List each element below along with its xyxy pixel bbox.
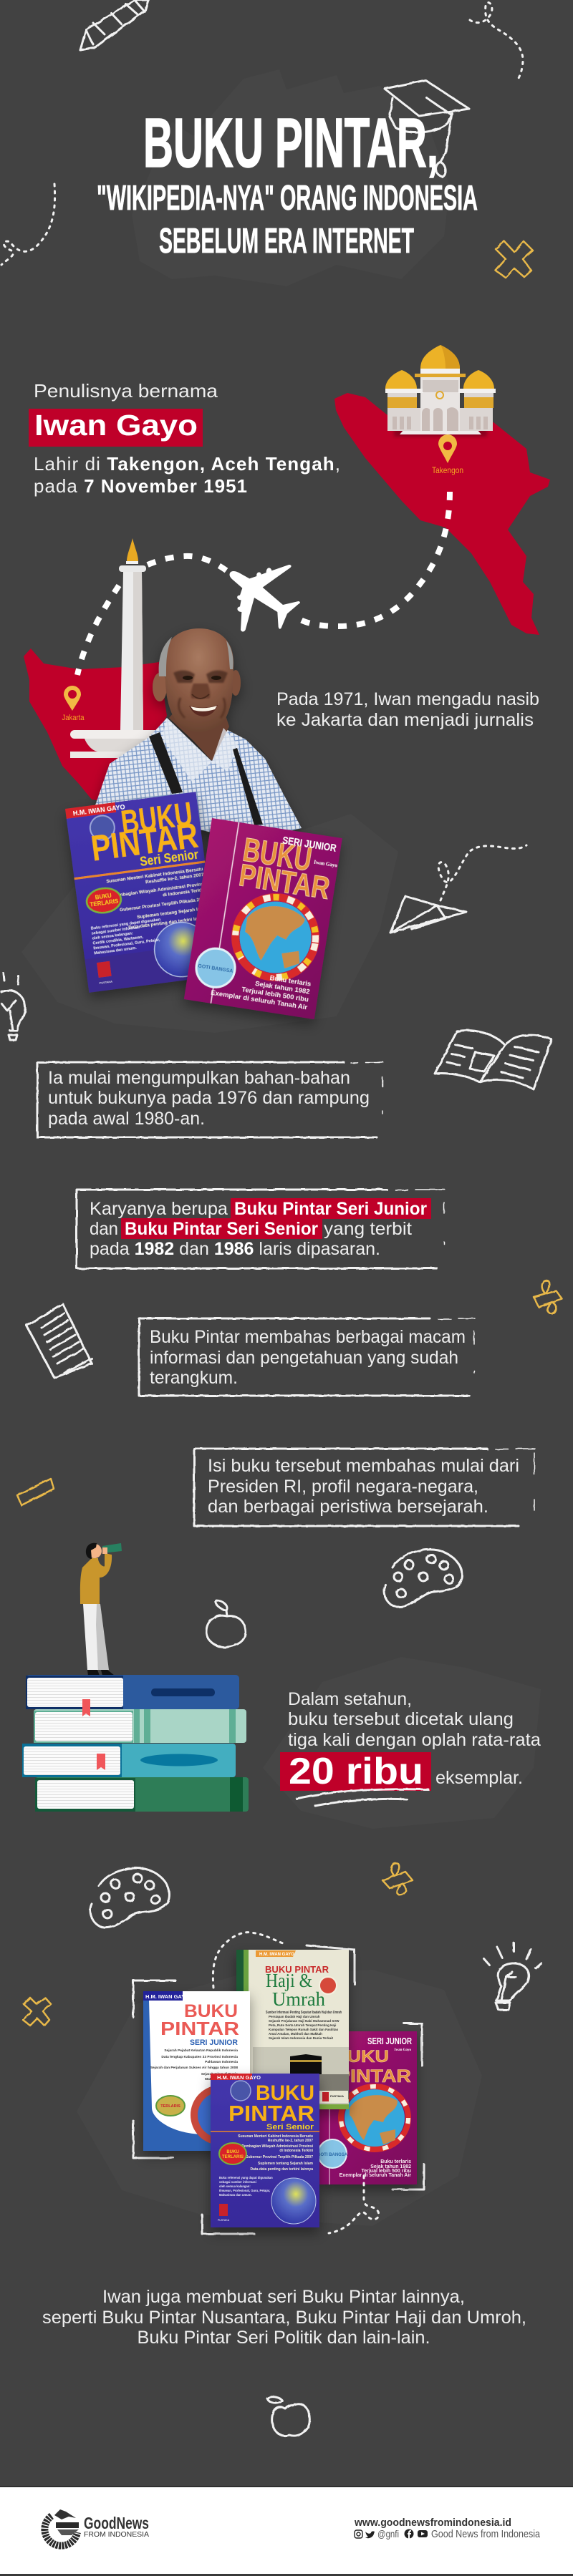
book cover: blue Seri Senior in collection: Gubernur Provinsi Terpilih Pilkada 2007 (246, 2155, 313, 2159)
book cover: blue Seri Senior in collection: BUKU (256, 2081, 314, 2105)
book: green (35, 1777, 249, 1812)
dotted trail below books (329, 2176, 379, 2233)
book cover: Haji and Umrah: PUSTAKA (330, 2094, 344, 2098)
book cover: blue Seri Senior in collection: H.M. IWAN GAYO (217, 2074, 261, 2081)
text box: collecting material (37, 1062, 383, 1137)
book cover: Seri Junior: Sejak tahun 1982 (254, 980, 310, 996)
icon: facebook (404, 2529, 414, 2539)
book cover: white Seri Junior: Sejarah Pejabat Kelautan Republik Indonesia (164, 2048, 238, 2053)
book cover: Haji and Umrah: Persiapan Ibadah Haji dan Umrah (269, 2015, 320, 2018)
book cover: Seri Senior: PUSTAKA (99, 980, 112, 985)
book cover: white Seri Junior: BUKU (184, 2001, 238, 2021)
book cover: Seri Junior: Exemplar di seluruh Tanah Air (211, 989, 308, 1011)
book cover: Seri Junior: BUKU (241, 831, 314, 878)
book cover: Haji and Umrah (236, 1950, 349, 2109)
book cover: Seri Senior: Cerdik cendikia, Wartawan, (92, 935, 144, 946)
dotted trail from paper plane (438, 845, 526, 900)
text: journalist caption (276, 689, 539, 730)
text box: contents: terangkum. (150, 1368, 238, 1388)
map: Aceh (334, 393, 550, 635)
icon: Jakarta pin: Jakarta (62, 714, 85, 722)
icon: chalk apple upper (206, 1600, 246, 1647)
icon: instagram (355, 2530, 362, 2538)
logo: GoodNews from Indonesia (44, 2509, 149, 2546)
chalk underline (297, 1789, 428, 1806)
book cover: Seri Junior: Buku terlaris (269, 974, 312, 988)
text: reprint statistic: tiga kali dengan oplah rata-rata (288, 1730, 541, 1750)
text box: topics: dan berbagai peristiwa bersejarah. (208, 1497, 488, 1517)
book cover: blue Seri Senior in collection: di Indonesia Terkini (279, 2149, 314, 2153)
book cover: magenta Seri Junior in collection: BUKU (333, 2047, 389, 2066)
book cover: blue Seri Senior in collection: Seri Senior (266, 2123, 314, 2132)
book cover: Haji and Umrah: Haji & (266, 1970, 312, 1991)
book cover: white Seri Junior: PINTAR (160, 2018, 239, 2039)
book: teal (22, 1744, 236, 1777)
book cover: Haji and Umrah: Umrah (272, 1988, 325, 2010)
dotted trail top right (470, 2, 523, 81)
highlight: Seri Senior (121, 1218, 322, 1239)
book cover: magenta Seri Junior in collection: Sejak tahun 1982 (370, 2164, 411, 2169)
book cover: Seri Senior: Data-data penting dan terkini lainnya (128, 915, 210, 930)
book: light teal (34, 1709, 246, 1743)
suspenders (149, 732, 183, 794)
book cover: Seri Senior: Gubernur Provinsi Terpilih Pilkada 2007 (120, 897, 208, 913)
text: author intro (29, 380, 340, 497)
icon: monument (70, 538, 163, 758)
book cover: Seri Junior: SERI JUNIOR (281, 835, 337, 855)
icon: chalk apple lower (267, 2397, 309, 2436)
book cover: Haji and Umrah: Peta, Rute Serta Umroh Tempat Penting Haji (269, 2023, 336, 2027)
icon: Jakarta pin (62, 686, 85, 722)
book cover: Seri Senior: BUKU (119, 794, 195, 841)
book cover: Seri Senior: Ilmuwan, Profesional, Guru, Pelajar, (93, 938, 160, 951)
icon: gold x lower (23, 1998, 51, 2026)
name highlight: Iwan Gayo (34, 409, 198, 442)
icon: open book (435, 1031, 552, 1089)
book cover: magenta Seri Junior in collection: Exemplar di seluruh Tanah Air (340, 2173, 411, 2178)
text: author intro: pada 7 November 1951 (34, 475, 247, 497)
text box: topics: Isi buku tersebut membahas mulai dari (208, 1456, 519, 1476)
text box: works published: dan (90, 1219, 118, 1239)
icon: youtube (418, 2530, 428, 2537)
mosque shadow (394, 428, 487, 437)
book cover: white Seri Junior: TERLARIS (160, 2104, 180, 2109)
website address: www.goodnewsfromindonesia.id (354, 2517, 511, 2529)
text box: topics (194, 1449, 535, 1526)
book cover: Seri Senior: Susunan Menteri Kabinet Indonesia Bersatu (106, 867, 203, 884)
book cover: blue Seri Senior in collection: Data-data penting dan terkini lainnya (250, 2167, 313, 2172)
book cover: white Seri Junior: Data lengkap Kabupaten 33 Provinsi Indonesia (161, 2055, 238, 2059)
chalk frame around book collection (133, 1945, 424, 2234)
book cover: Seri Senior: Seri Senior (139, 847, 199, 869)
book cover: Seri Senior: H.M. IWAN GAYO (72, 803, 125, 817)
book cover: Seri Junior: PINTAR (237, 857, 332, 906)
book cover: Seri Senior (65, 792, 220, 993)
book cover: blue Seri Senior in collection: Buku referensi yang dapat digunakan (219, 2176, 273, 2179)
icon: airplane (230, 565, 300, 631)
background scribble behind title (132, 69, 450, 286)
nose (192, 694, 209, 699)
book cover: Haji and Umrah: Sumber Informasi Penting Seputar Ibadah Haji dan Umrah (266, 2011, 342, 2015)
social name: Good News from Indonesia (431, 2528, 541, 2540)
highlight: 20 ribu: 20 ribu (289, 1751, 423, 1792)
photo: Iwan Gayo (95, 628, 302, 841)
text box: works published: Buku Pintar Seri Senior (125, 1219, 318, 1239)
dotted trail above books (213, 1933, 285, 1988)
highlight: Seri Junior (231, 1198, 431, 1219)
icon: gold rectangle (17, 1479, 54, 1505)
book cover: Haji and Umrah: Sejarah Perjalanan Haji Nabi Muhammad SAW (269, 2019, 340, 2023)
book cover: Seri Senior: BUKU (95, 893, 112, 901)
text: reprint statistic: buku tersebut dicetak ulang (288, 1709, 514, 1729)
text box: collecting material: pada awal 1980-an. (48, 1109, 205, 1129)
icon: chalk palette lower (90, 1868, 169, 1928)
book cover: blue Seri Senior in collection: PINTAR (228, 2101, 314, 2126)
icon: Takengon pin: Takengon (432, 465, 463, 475)
text: other series (42, 2287, 526, 2348)
dotted trail left (1, 184, 55, 265)
text box: collecting material: untuk bukunya pada 1976 dan rampung (48, 1088, 370, 1108)
footer (0, 2486, 573, 2576)
icon: chalk palette upper (384, 1550, 462, 1607)
text box: works published: pada 1982 dan 1986 laris dipasaran. (90, 1239, 380, 1259)
book cover: Seri Senior: sebagai sumber informasi (91, 925, 140, 936)
logo: GoodNews from Indonesia: GoodNews (84, 2514, 149, 2532)
book: blue (26, 1675, 239, 1709)
book cover: white Seri Junior: Sejarah Islam di Dunia (201, 2072, 238, 2076)
map: Jakarta (24, 648, 167, 802)
illustration: man with binoculars (80, 1543, 122, 1676)
text: other series: seperti Buku Pintar Nusantara, Buku Pintar Haji dan Umroh, (42, 2308, 526, 2328)
book cover: blue Seri Senior in collection: Mahasiswa dan umum. (219, 2193, 252, 2197)
book cover: blue Seri Senior in collection: Reshuffle ke-2, tahun 2007 (268, 2139, 313, 2143)
book cover: blue Seri Senior in collection: Ilmuwan, Profesional, Guru, Pelajar, (219, 2189, 270, 2192)
head (163, 628, 233, 732)
social handle: @gnfi (377, 2528, 399, 2539)
book cover: blue Seri Senior in collection (211, 2074, 319, 2227)
icon: twitter (365, 2531, 375, 2538)
book cover: Seri Junior: Iwan Gayo (314, 860, 338, 869)
text: reprint statistic (280, 1689, 541, 1806)
text: reprint statistic: Dalam setahun, (288, 1689, 412, 1709)
route line: plane to Jakarta (77, 556, 226, 675)
text: reprint statistic: eksemplar. (435, 1768, 523, 1788)
book cover: Seri Senior: Mahasiswa dan umum. (94, 946, 138, 956)
book cover: Seri Junior: GOTI BANGSA (198, 963, 233, 974)
book cover: blue Seri Senior in collection: PUSTAKA (218, 2219, 230, 2222)
route line: Takengon to plane (299, 492, 450, 626)
title (97, 104, 478, 261)
icon: mosque (385, 334, 496, 434)
book cover: Seri Junior (184, 818, 342, 1019)
book cover: magenta Seri Junior in collection: SERI JUNIOR (367, 2036, 412, 2046)
book cover: white Seri Junior: SERI JUNIOR (190, 2038, 238, 2047)
bookmark: red upper (82, 1699, 90, 1716)
book cover: magenta Seri Junior in collection: GOTI BANGSA (317, 2153, 348, 2157)
text box: topics: Presiden RI, profil negara-negara, (208, 1477, 478, 1497)
book cover: white Seri Junior (143, 1991, 251, 2151)
text: other series: Iwan juga membuat seri Buku Pintar lainnya, (102, 2287, 465, 2307)
book cover: magenta Seri Junior in collection: Terjual lebih 500 ribu (361, 2169, 411, 2174)
text: journalist caption: ke Jakarta dan menjadi jurnalis (276, 710, 534, 730)
shirt (95, 718, 302, 841)
book cover: blue Seri Senior in collection: Susunan Menteri Kabinet Indonesia Bersatu (238, 2134, 313, 2139)
text box: works published: Karyanya berupa (90, 1199, 228, 1219)
text box: works published: Buku Pintar Seri Junior (234, 1199, 427, 1219)
text box: contents: Buku Pintar membahas berbagai macam (150, 1327, 466, 1347)
book cover: blue Seri Senior in collection: oleh semua kalangan: (219, 2184, 251, 2188)
neck (169, 705, 229, 761)
text: other series: Buku Pintar Seri Politik dan lain-lain. (138, 2328, 430, 2348)
book cover: Seri Senior: PINTAR (89, 815, 201, 869)
collar (162, 718, 212, 782)
icon: paper plane (390, 896, 466, 933)
icon: chalk pencil (80, 0, 148, 50)
icon: gold scroll (534, 1280, 562, 1313)
text box: collecting material: Ia mulai mengumpulkan bahan-bahan (48, 1068, 350, 1088)
hair (159, 637, 233, 676)
book cover: white Seri Junior: H.M. IWAN GAYO (145, 1993, 189, 2000)
icon: gold x (496, 241, 533, 278)
book cover: magenta Seri Junior in collection: Iwan Gayo (395, 2048, 411, 2052)
book cover: blue Seri Senior in collection: TERLARIS (222, 2155, 244, 2159)
book cover: magenta Seri Junior in collection (317, 2031, 417, 2184)
text: author intro: Lahir di Takengon, Aceh Tengah, (34, 453, 340, 475)
book cover: Seri Senior: Reshuffle ke-2, tahun 2007 (145, 873, 204, 885)
icon: light bulb right (484, 1943, 541, 2010)
book cover: Haji and Umrah: H.M. IWAN GAYO (259, 1953, 294, 1957)
book cover: blue Seri Senior in collection: Suplemen tentang Sejarah Islam (258, 2162, 314, 2166)
book cover: white Seri Junior: Sejarah dan Perjalanan Sukses Air hingga tahun 2008 (150, 2066, 238, 2070)
book cover: Seri Junior: Terjual lebih 500 ribu (241, 986, 309, 1004)
book cover: Haji and Umrah: BUKU PINTAR (265, 1964, 329, 1975)
book cover: Seri Senior: Buku referensi yang dapat digunakan (91, 918, 161, 931)
book cover: white Seri Junior: Matematika & Fisika (205, 2077, 238, 2081)
book cover: Haji and Umrah: Kumpulan Telepon Rumah Sakit dan Fasilitas (269, 2028, 339, 2031)
ears (153, 673, 167, 701)
background scribble behind books (21, 814, 398, 1033)
book cover: blue Seri Senior in collection: BUKU (226, 2150, 239, 2154)
text: journalist caption: Pada 1971, Iwan mengadu nasib (276, 689, 539, 709)
text box: works published (77, 1190, 445, 1268)
book cover: Seri Senior: TERLARIS (90, 898, 119, 908)
background scribble behind book collection (77, 1970, 482, 2226)
background scribble behind statistic (263, 1657, 541, 1829)
brows and eye shadow (173, 670, 228, 718)
book cover: Seri Senior: Suplemen tentang Sejarah Islam (137, 905, 208, 920)
icon: gold scroll lower (382, 1863, 413, 1895)
bookmark: red lower (97, 1754, 105, 1770)
book cover: Seri Senior: di Indonesia Terkini (163, 888, 206, 898)
book cover: blue Seri Senior in collection: sebagai sumber informasi (219, 2180, 256, 2184)
book cover: Haji and Umrah: Amal Amalan, Mukholi dan Makkah (269, 2032, 322, 2036)
book cover: Seri Senior: Pembagian Wilayah Administrasi Provinsi (112, 882, 206, 898)
illustration: stack of books (22, 1675, 249, 1812)
smile (189, 705, 218, 716)
icon: light bulb left (1, 973, 25, 1040)
text box: works published: yang terbit (324, 1219, 412, 1239)
book cover: magenta Seri Junior in collection: PINTAR (337, 2066, 411, 2086)
book cover: Seri Senior: oleh semua kalangan: (92, 931, 133, 941)
text box: contents: informasi dan pengetahuan yang sudah (150, 1348, 458, 1368)
logo: GoodNews from Indonesia: FROM INDONESIA (84, 2530, 149, 2539)
icon: graduation cap (385, 80, 469, 177)
book cover: blue Seri Senior in collection: Pembagian Wilayah Administrasi Provinsi (241, 2144, 314, 2149)
text: author intro: Penulisnya bernama (34, 380, 218, 402)
text box: contents (139, 1318, 475, 1396)
icon: notebook (27, 1304, 92, 1378)
book cover: Haji and Umrah: Sejarah Islam Indonesia dan Dunia Terkait (269, 2036, 333, 2040)
book cover: white Seri Junior: Pahlawan Indonesia (205, 2060, 238, 2064)
book cover: magenta Seri Junior in collection: Buku terlaris (380, 2159, 411, 2164)
icon: Takengon pin (432, 434, 463, 475)
